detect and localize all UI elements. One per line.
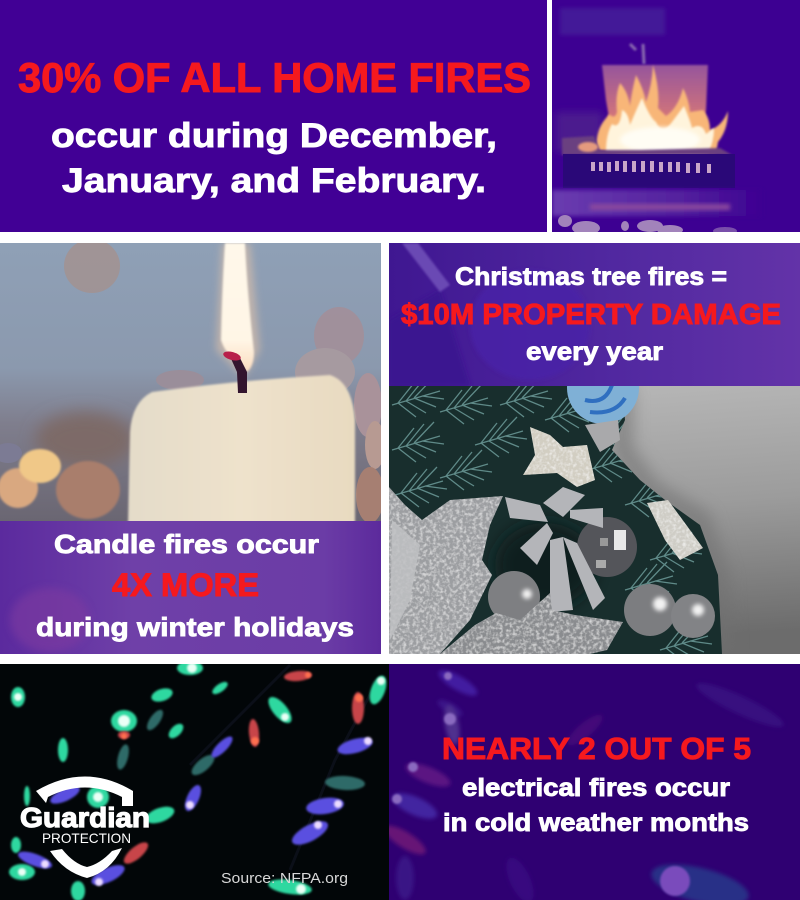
- panel: 30% of home fires: [0, 0, 547, 232]
- bauble highlights: [522, 589, 704, 616]
- callout: candle fires: [0, 521, 381, 654]
- LED tips: [392, 672, 456, 804]
- light strings: [190, 665, 378, 870]
- text: January and February: January, and February.: [62, 162, 486, 200]
- wick ember: [223, 352, 241, 360]
- text: occur during December: occur during December,: [51, 117, 497, 155]
- bokeh lights: [0, 239, 385, 523]
- faded LEDs: [380, 666, 787, 900]
- text: $10M property damage: $10M PROPERTY DAMAGE: [401, 299, 781, 331]
- overlay bauble: [470, 270, 590, 380]
- text: in cold weather months: in cold weather months: [443, 809, 749, 837]
- bright LED tip: [660, 866, 690, 896]
- disco highlight: [596, 530, 626, 568]
- lace butterfly: [523, 427, 595, 487]
- disco ball: [577, 517, 637, 577]
- white LED tips: [14, 663, 385, 894]
- panel: candle photo: [0, 239, 385, 525]
- hook: [630, 44, 644, 64]
- source note: Source: NFPA.org: [221, 870, 348, 887]
- silver bow: [505, 487, 605, 612]
- silver leaf left: [389, 487, 503, 654]
- fire back wall: [601, 64, 710, 118]
- flame glow: [216, 243, 260, 378]
- logo subtitle: PROTECTION: [42, 830, 131, 846]
- hearth highlight: [590, 204, 730, 210]
- hearth floor: [552, 190, 762, 216]
- dark tree core: [495, 523, 595, 607]
- candle body: [128, 375, 355, 525]
- heading: nearly 2 out of 5: NEARLY 2 OUT OF 5: [442, 731, 751, 766]
- logo shield bottom: [50, 848, 122, 878]
- silver leaf bottom: [440, 593, 623, 654]
- text: christmas tree fires: Christmas tree fires =: [455, 263, 727, 291]
- silver bauble right: [671, 594, 715, 638]
- fireplace left side: [556, 112, 602, 152]
- overlay bokeh: [10, 588, 90, 652]
- silver leaf left highlights: [390, 520, 420, 640]
- panel: christmas tree photo: [389, 386, 800, 654]
- wick: [232, 359, 247, 393]
- blue LEDs: [16, 734, 374, 889]
- dim teal LEDs: [115, 707, 365, 791]
- grate bars: [591, 161, 711, 173]
- wall shadow: [612, 395, 724, 584]
- text: during winter holidays: during winter holidays: [36, 612, 354, 642]
- blue bauble: [567, 386, 639, 424]
- mantel: [560, 8, 665, 35]
- glowing embers: [578, 142, 598, 152]
- lace right: [647, 500, 703, 560]
- silver bauble centre: [624, 584, 676, 636]
- green LEDs: [9, 661, 390, 900]
- overlay pine: [389, 290, 470, 386]
- callout: christmas tree fires: [389, 243, 800, 386]
- red LEDs: [118, 670, 364, 867]
- logo shield top: [36, 776, 133, 806]
- blue bauble pattern: [585, 385, 625, 412]
- stacked logs: [558, 215, 737, 232]
- panel: electrical fires: [380, 664, 800, 900]
- silver ornament top: [585, 420, 620, 452]
- text: 4X more: 4X MORE: [112, 567, 259, 603]
- panel: fireplace photo: [552, 0, 800, 235]
- red LED tips: [121, 672, 363, 745]
- grate: [563, 154, 735, 188]
- flame: [221, 243, 254, 372]
- blue LED tips: [41, 737, 372, 886]
- logo wordmark: Guardian: [20, 802, 150, 833]
- icon: flame core: [620, 127, 700, 153]
- icon: flames inner: [606, 98, 714, 156]
- panel: christmas lights photo: [0, 661, 390, 900]
- silver bauble left: [488, 571, 540, 623]
- text: every year: every year: [526, 338, 663, 366]
- logs under fire: [562, 136, 732, 155]
- logo: guardian protection: [20, 776, 150, 878]
- overlay ribbon: [402, 243, 450, 292]
- text: electrical fires occur: electrical fires occur: [462, 774, 730, 802]
- heading: 30% of all home fires: 30% OF ALL HOME FIRES: [18, 54, 531, 101]
- icon: flames outer: [596, 65, 728, 155]
- pine needles: [392, 377, 712, 662]
- tree mass: [389, 386, 722, 654]
- text: candle fires occur: Candle fires occur: [54, 529, 319, 559]
